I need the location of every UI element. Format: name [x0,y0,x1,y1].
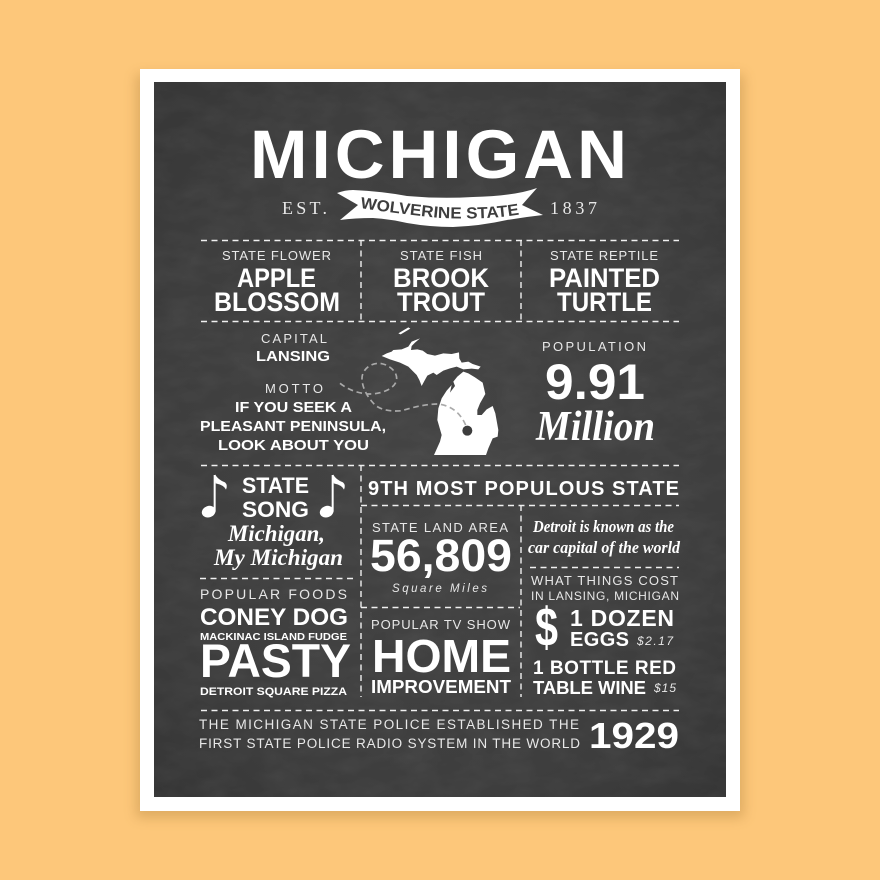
panel: motto [200,381,386,454]
song name: Michigan, [227,521,325,546]
panel: popular foods: PASTY [200,634,351,687]
unit: Million [535,404,655,450]
panel: popular foods: DETROIT SQUARE PIZZA [200,686,347,698]
panel: popular tv show: IMPROVEMENT [371,677,511,697]
panel: capital [256,331,330,365]
panel: state reptile [549,248,660,317]
panel: motto: PLEASANT PENINSULA, [200,418,386,435]
isle royale [398,327,410,334]
panel: state flower: BLOSSOM [214,287,340,317]
chalk smudge texture [154,82,726,797]
panel: what things cost: TABLE WINE [533,677,646,698]
value: IF YOU SEEK A [235,399,352,416]
number: 56,809 [370,530,512,581]
label: CAPITAL [261,331,327,346]
callout: car capital: Detroit is known as the [532,517,674,536]
eggs price: 1 DOZEN [570,605,674,631]
label: POPULAR FOODS [200,586,347,602]
panel: state reptile: TURTLE [557,287,652,317]
fact text: THE MICHIGAN STATE POLICE ESTABLISHED THE [199,717,579,732]
banner: established date and nickname [282,188,597,227]
value: BROOK [393,263,489,293]
panel: state song [200,473,345,570]
dashed route line [340,363,466,426]
panel: motto: LOOK ABOUT YOU [218,437,369,454]
icon: dollar sign: $ [535,596,558,658]
value: APPLE [237,263,316,293]
callout: car capital: car capital of the world [528,538,680,557]
title: MICHIGAN [250,116,627,193]
footer fact [199,715,679,756]
panel: state song: My Michigan [213,545,343,570]
unit: Square Miles [392,583,487,595]
panel: population [535,339,655,450]
white frame [140,69,740,811]
label: STATE FLOWER [222,248,331,263]
upper peninsula [382,338,481,386]
year: 1929 [589,715,679,756]
panel: state flower [214,248,340,317]
est. label: EST. [282,198,327,218]
chalkboard panel [154,82,726,797]
panel: what things cost [531,573,679,698]
heading: STATE [242,473,309,498]
panel: popular tv show [371,617,511,697]
label: STATE REPTILE [550,248,658,263]
label: POPULAR TV SHOW [371,617,511,632]
panel: state land area [370,520,512,595]
panel: state fish: TROUT [397,287,485,317]
label: POPULATION [542,339,646,354]
panel: state song: SONG [242,497,309,522]
icon: left music note [200,474,227,519]
panel: popular foods [200,586,351,698]
panel: what things cost: IN LANSING, MICHIGAN [531,589,679,603]
panel: what things cost: $15 [653,681,676,695]
panel: what things cost: $2.17 [636,634,674,648]
panel: state fish [393,248,489,317]
icon: right music note [318,474,345,519]
ribbon text: WOLVERINE STATE [362,197,519,219]
value: LANSING [256,348,330,365]
ribbon [337,188,543,227]
food list: CONEY DOG [200,604,348,631]
map of Michigan [340,327,498,455]
value: PAINTED [549,263,660,293]
label: STATE FISH [400,248,482,263]
callout: car capital [528,517,680,557]
frame shadow [136,74,744,818]
year label: 1837 [550,198,597,218]
wine price: 1 BOTTLE RED [533,658,676,679]
label: STATE LAND AREA [372,520,508,535]
heading: population rank: 9TH MOST POPULOUS STATE [368,478,679,500]
number: 9.91 [545,354,645,410]
label: MOTTO [265,381,323,396]
footer fact: FIRST STATE POLICE RADIO SYSTEM IN THE WORLD [199,736,580,751]
panel: popular foods: MACKINAC ISLAND FUDGE [200,631,347,643]
lower peninsula [434,372,498,455]
heading: WHAT THINGS COST [531,573,678,588]
title: HOME [372,630,511,682]
capital marker [462,426,472,436]
panel: what things cost: EGGS [570,629,629,651]
